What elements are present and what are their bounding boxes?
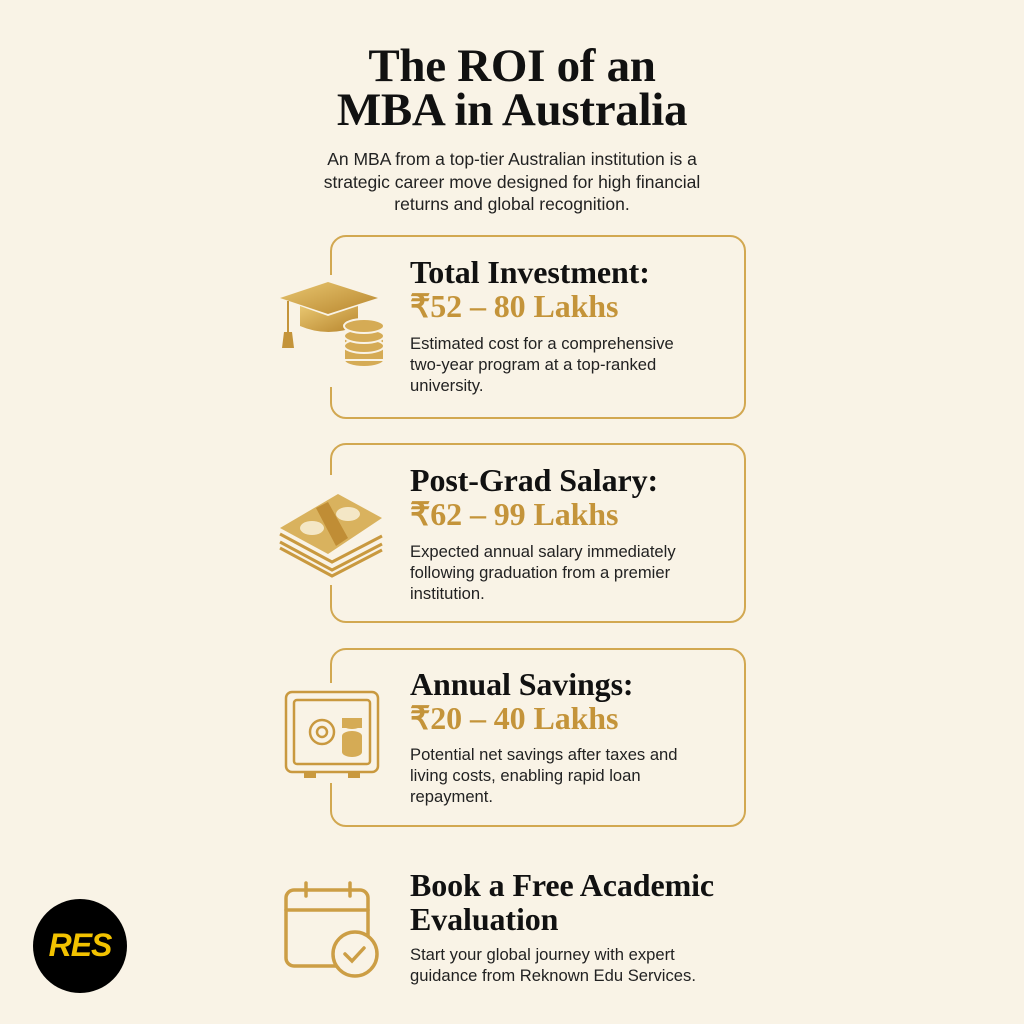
card: annual savings xyxy=(330,648,746,827)
title: MBA in Australia xyxy=(337,84,687,136)
heading: total investment xyxy=(410,254,650,324)
description: Estimated cost for a comprehensive two‑year program at a top‑ranked university. xyxy=(410,334,674,395)
icon: safe with coins xyxy=(284,690,380,778)
heading: annual savings: ₹20 – 40 Lakhs xyxy=(410,700,618,736)
logo: RES: RES xyxy=(49,927,111,963)
heading: total investment: Total Investment: xyxy=(410,254,650,290)
heading: annual savings xyxy=(410,666,634,736)
heading: book evaluation: Book a Free Academic xyxy=(410,867,714,903)
title: The ROI of an xyxy=(368,40,656,92)
icon: cash stack xyxy=(279,494,383,578)
title xyxy=(337,40,687,136)
card: total investment xyxy=(330,235,746,419)
heading: post-grad salary xyxy=(410,462,658,532)
heading: book evaluation: Evaluation xyxy=(410,901,558,937)
description: Expected annual salary immediately following graduation from a premier institution. xyxy=(410,542,676,603)
subtitle: An MBA from a top-tier Australian institution is a strategic career move designed for high financial returns and global recognition. xyxy=(324,149,700,214)
heading: total investment: ₹52 – 80 Lakhs xyxy=(410,288,618,324)
heading: post-grad salary: Post-Grad Salary: xyxy=(410,462,658,498)
description: Potential net savings after taxes and living costs, enabling rapid loan repayment. xyxy=(410,745,678,806)
icon: graduation cap with coins xyxy=(280,282,383,366)
heading: annual savings: Annual Savings: xyxy=(410,666,634,702)
icon: calendar check xyxy=(284,881,379,978)
card: post-grad salary xyxy=(330,443,746,623)
description: Start your global journey with expert guidance from Reknown Edu Services. xyxy=(410,945,696,985)
heading: post-grad salary: ₹62 – 99 Lakhs xyxy=(410,496,618,532)
heading: book evaluation xyxy=(410,867,714,937)
logo: RES xyxy=(33,899,127,993)
